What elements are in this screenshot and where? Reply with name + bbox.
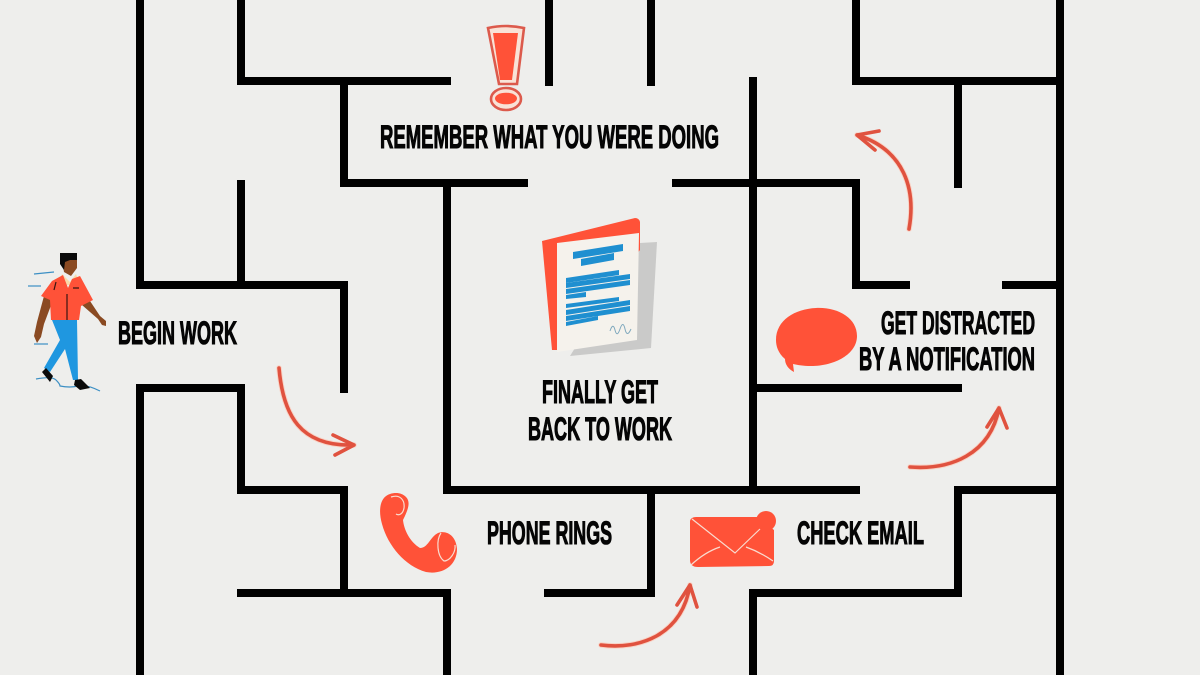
arrow: begin work to phone (279, 368, 354, 455)
icon: speech bubble (776, 308, 857, 372)
icon: phone (380, 493, 457, 573)
label: phone rings: PHONE RINGS (487, 515, 612, 551)
icon: exclamation mark (488, 26, 524, 110)
label: get distracted by a notification (859, 305, 1035, 377)
label: remember what you were doing: REMEMBER WHAT YOU WERE DOING (380, 119, 719, 155)
label: get distracted by a notification: GET DISTRACTED (881, 305, 1035, 341)
arrow: phone to email (601, 585, 697, 646)
label: finally get back to work: FINALLY GET (542, 374, 658, 410)
arrow: notification to remember (857, 131, 911, 229)
label: get distracted by a notification: BY A NOTIFICATION (859, 341, 1035, 377)
maze walls (140, 0, 1060, 675)
icon: walking person (28, 253, 106, 391)
icon: envelope (690, 511, 776, 567)
icon: document (542, 218, 657, 356)
label: finally get back to work: BACK TO WORK (528, 411, 672, 447)
arrow: email to notification (910, 408, 1007, 467)
label: check email: CHECK EMAIL (797, 515, 924, 551)
label: finally get back to work (528, 374, 672, 447)
label: begin work: BEGIN WORK (118, 315, 237, 351)
